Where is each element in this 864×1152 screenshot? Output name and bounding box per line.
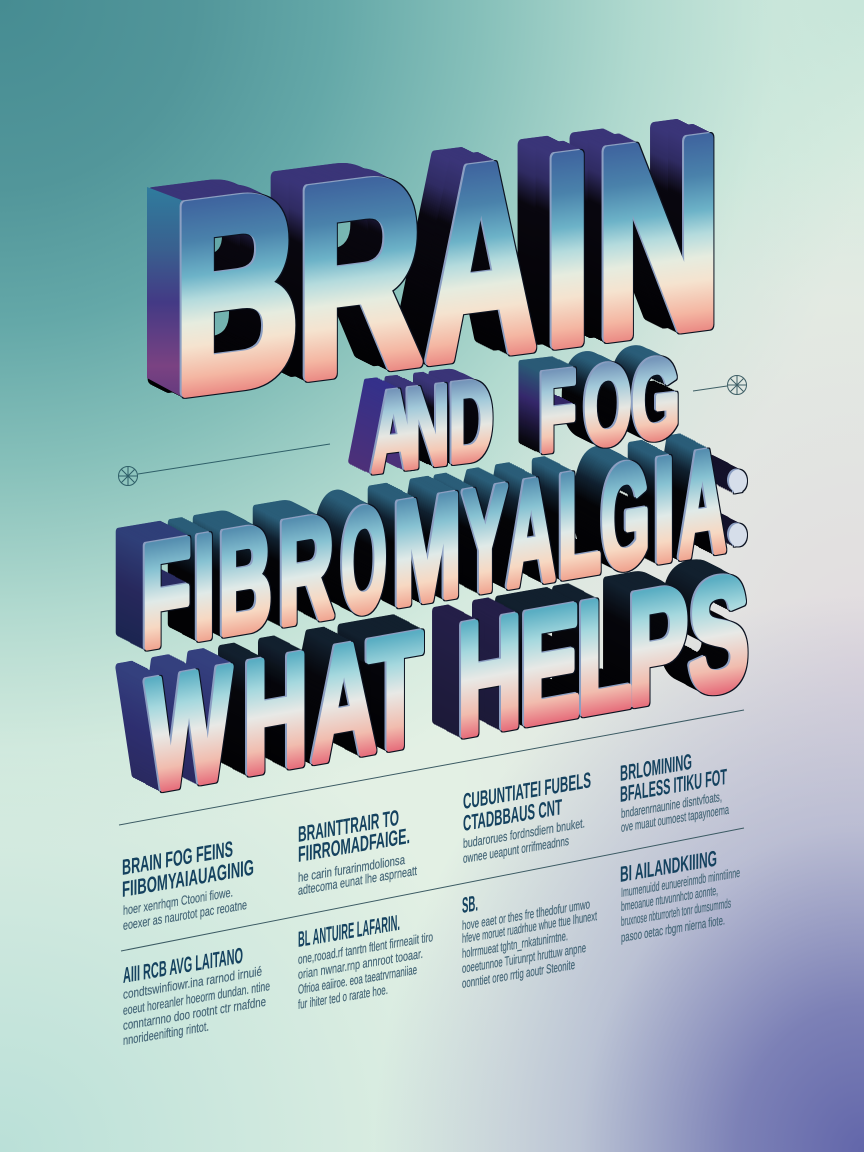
face: WHAT HELPS: WHAT HELPS [147, 542, 749, 825]
decorative line with circle marker, right [693, 376, 746, 394]
face: FIBROMYALGIA:: G [601, 430, 650, 602]
text block: column 3 top: budarorues fordnsdiern bnuket. [463, 815, 585, 851]
text block: column 2 top [298, 805, 417, 898]
text block: column 2 top: BRAINTTRAIR TO [298, 805, 399, 847]
text block: column 3 top [463, 767, 591, 866]
text block: column 2 bottom: Ofrioa eaiiroe. eoa taeatrvrnaniiae [298, 962, 417, 997]
face: FIBROMYALGIA:: O [341, 474, 387, 646]
face: FIBROMYALGIA:: : [728, 413, 748, 579]
left side face of B [147, 187, 184, 398]
text block: column 1 bottom: AIII RCB AVG LAITANO [123, 943, 243, 988]
text block: column 3 bottom [462, 890, 597, 991]
face: BRAIN: A [425, 102, 537, 419]
extrusion: BRAIN: IN [543, 80, 722, 404]
text block: column 4 bottom: Imumenuidd eunuereinmdb minntiinne [621, 865, 740, 900]
text block: column 4 bottom [620, 846, 740, 945]
extrusion: FIBROMYALGIA:: R [279, 483, 334, 656]
text block: column 3 bottom: SB. [462, 890, 478, 918]
text block: column 4 top: ove muaut oumoest tapaynoema [621, 802, 729, 835]
extrusion: AND FOG: AND FOG [371, 335, 680, 497]
title line: BRAIN [147, 80, 722, 452]
text block: column 2 top: he carin furarinmdolionsa [298, 852, 406, 885]
text block: column 1 top: hoer xenrhqm Ctooni fiowe. [123, 884, 233, 918]
text block: column 3 top: CUBUNTIATEI FUBELS [463, 767, 591, 814]
text block: column 3 bottom: oonntiet oreo rrtig aoutr Steonite [462, 957, 575, 991]
text block: column 2 bottom: one,rooad.rf tanrtn ftlent firrneaiit tiro [298, 929, 433, 967]
text block: column 1 bottom [123, 943, 270, 1048]
text block: column 4 top: BRLOMINING [620, 749, 692, 786]
face: FIBROMYALGIA: [141, 413, 748, 680]
face: FIBROMYALGIA:: I [194, 504, 215, 670]
text block: column 3 bottom: holrrmueat tghtn_rnkatunirntne. [462, 928, 568, 961]
extrusion: FIBROMYALGIA:: L [558, 440, 601, 610]
text block: column 2 bottom: orian nwnar.rnp annroot tooaar. [298, 946, 423, 982]
title line: WHAT HELPS [147, 542, 749, 825]
text block: column 3 bottom: hfeve moruet ruadrhue whue ttue Ihunext [462, 908, 597, 946]
face: FIBROMYALGIA:: I [653, 426, 675, 593]
text block: column 4 top [620, 749, 729, 835]
text block: column 1 top: BRAIN FOG FEINS [122, 836, 233, 880]
extrusion: FIBROMYALGIA:: M [393, 463, 462, 637]
text block: column 2 bottom: fur ihiter ted o rarate hoe. [298, 982, 388, 1012]
text block: column 4 bottom: bruxnose nbturrorteh tonr dumsumrnds [621, 895, 731, 929]
extrusion: FIBROMYALGIA:: B [219, 494, 272, 666]
text block: column 4 bottom: bmeoanue ntuvunnhcto aonnte, [621, 883, 718, 914]
text block: column 3 top: CTADBBAUS CNT [463, 794, 562, 836]
extrusion: FIBROMYALGIA: [141, 413, 748, 680]
face: FIBROMYALGIA:: F [141, 508, 191, 680]
face: FIBROMYALGIA:: M [393, 463, 462, 637]
text block: column 2 bottom [298, 910, 433, 1012]
decorative line with circle marker, left [118, 444, 330, 486]
extrusion: BRAIN: BR [173, 119, 423, 452]
face: FIBROMYALGIA:: A [679, 418, 726, 590]
extrusion: FIBROMYALGIA:: I [194, 504, 215, 670]
divider rule, upper [119, 710, 744, 825]
extrusion: FIBROMYALGIA:: O [341, 474, 387, 646]
text block: column 1 bottom: eoeut horeanler hoeorm dundan. ntine [123, 978, 270, 1018]
text block: column 3 bottom: ooeetunnoe Tuirunrpt hruttuw anpne [462, 940, 586, 976]
title line: FIBROMYALGIA: [141, 413, 748, 680]
extrusion: WHAT HELPS: WHAT HELPS [147, 542, 749, 825]
text block: column 3 top: ownee ueapunt orrifmeadnns [463, 833, 569, 866]
text block: column 1 bottom: nnorideenifting rintot. [123, 1018, 209, 1048]
extrusion: FIBROMYALGIA:: G [601, 430, 650, 602]
text block: column 1 top: FIIBOMYAIAUAGINIG [122, 855, 254, 902]
extrusion: FIBROMYALGIA:: A [507, 448, 556, 618]
text block: column 1 top [122, 836, 254, 933]
face: FIBROMYALGIA:: R [279, 483, 334, 656]
extrusion: FIBROMYALGIA:: : [728, 413, 748, 579]
extrusion: FIBROMYALGIA:: I [653, 426, 675, 593]
face: FIBROMYALGIA:: A [507, 448, 556, 618]
text block: column 4 bottom: pasoo oetac rbgm nierna fiote. [621, 912, 725, 945]
extrusion: FIBROMYALGIA:: F [141, 508, 191, 680]
face: BRAIN: BR [173, 119, 423, 452]
extrusion: BRAIN [173, 80, 722, 452]
face: FIBROMYALGIA:: B [219, 494, 272, 666]
text block: column 4 top: BFALESS ITIKU FOT [620, 764, 727, 807]
divider rule, lower [121, 828, 744, 951]
text block: column 2 bottom: BL ANTUIRE LAFARIN. [298, 910, 400, 952]
text block: column 2 top: FIIRROMADFAIGE. [298, 823, 410, 867]
extrusion: FIBROMYALGIA:: Y [463, 455, 508, 626]
text block: column 1 top: eoexer as naurotot pac reoatne [123, 897, 247, 933]
face: FIBROMYALGIA:: Y [463, 455, 508, 626]
text block: column 1 bottom: condtswinfiowr.ina rarnod irnuié [123, 963, 262, 1002]
text block: column 4 top: bndarenrnaunine disntvfoats, [621, 789, 722, 821]
face: FIBROMYALGIA:: L [558, 440, 601, 610]
extrusion: FIBROMYALGIA:: A [679, 418, 726, 590]
text block: column 1 bottom: conntarnno doo rootnt ctr rnafdne [123, 994, 266, 1033]
face: BRAIN: IN [543, 80, 722, 404]
face: BRAIN [173, 80, 722, 452]
extrusion: BRAIN: A [425, 102, 537, 419]
text block: column 4 bottom: BI AILANDKIIING [620, 846, 717, 887]
text block: column 2 top: adtecoma eunat lhe asprneatt [298, 863, 417, 898]
text block: column 3 bottom: hove eaet or thes fre tlhedofur umwo [462, 896, 590, 933]
face: AND FOG: AND FOG [371, 335, 680, 497]
title line: AND FOG [371, 335, 680, 497]
